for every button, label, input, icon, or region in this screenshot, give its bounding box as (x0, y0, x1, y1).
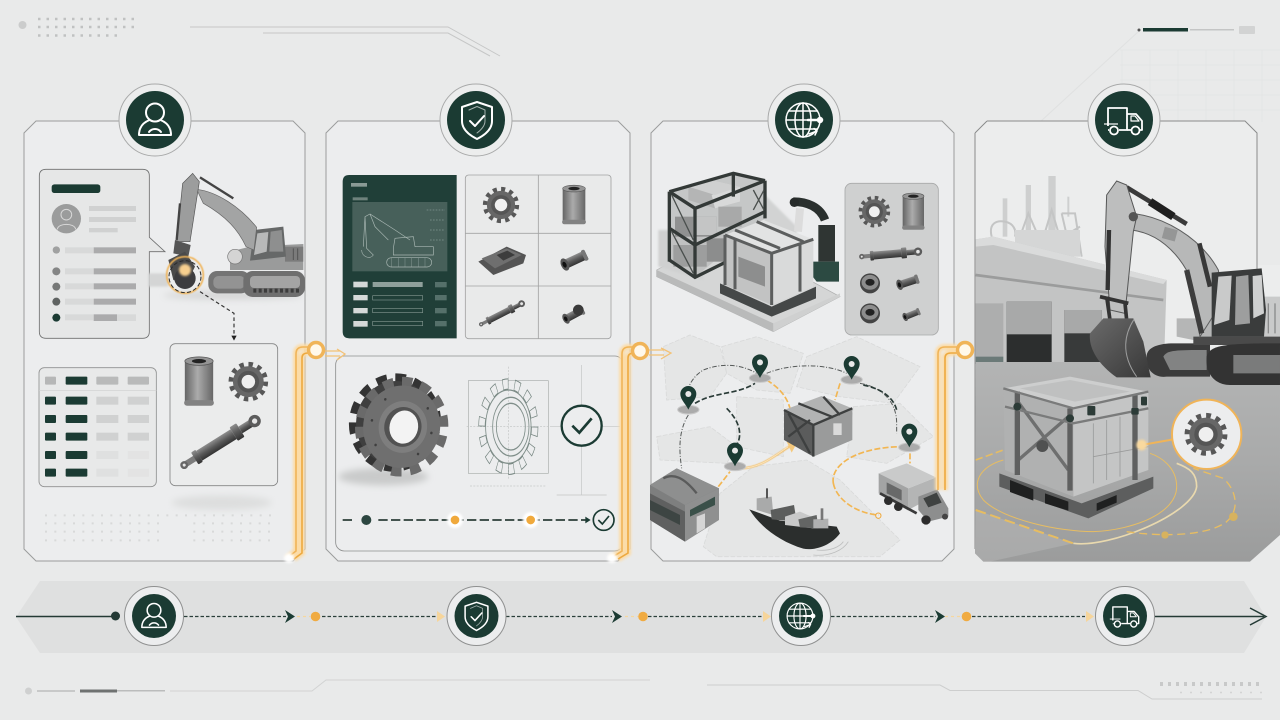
timeline orange markers (311, 612, 971, 621)
delivery truck (879, 463, 948, 525)
packing crate (720, 220, 816, 317)
icon badge: user (119, 84, 191, 156)
progress timeline (343, 510, 614, 530)
process timeline band (16, 581, 1266, 653)
parts grid (465, 175, 611, 339)
large gear (347, 373, 451, 477)
timeline node: shield (447, 586, 506, 646)
connector: step 3 to step 4 (938, 342, 972, 490)
icon badge: globe (768, 84, 840, 156)
connector: step 2 to step 3 (607, 344, 671, 563)
timeline node: truck (1096, 586, 1154, 646)
faint route map (657, 335, 933, 557)
callout: delivered gear (1136, 400, 1241, 469)
decorative dot field (45, 515, 275, 540)
robot arm (790, 198, 839, 282)
panel: step 1 request (24, 121, 305, 561)
connector: step 1 to step 2 (284, 342, 345, 563)
dashed delivery routes (680, 365, 910, 518)
icon badge: shield (440, 84, 512, 156)
icon badge: truck (1088, 84, 1160, 156)
yellow ground route (976, 450, 1238, 544)
timeline node: user (124, 586, 184, 646)
large excavator (1090, 181, 1280, 385)
dark blueprint sheet (343, 175, 457, 338)
warehouse platform with rack and crate (657, 173, 840, 332)
parts data table (39, 368, 156, 487)
gear blueprint (467, 367, 550, 486)
timeline pale arrows (437, 611, 1094, 622)
warehouse building (650, 468, 719, 542)
bottom right decoration (707, 684, 1262, 699)
icon: small excavator (148, 173, 305, 299)
arrow: dashed to parts box (200, 292, 237, 341)
yard ground (975, 362, 1280, 562)
shadow (172, 495, 272, 510)
bottom left decoration (25, 680, 650, 694)
location pins (678, 354, 920, 471)
factory building (976, 237, 1167, 364)
callout: highlighted part on excavator (167, 257, 203, 293)
icon: approved check (550, 365, 620, 495)
parts box (170, 344, 278, 486)
shipment crate (784, 396, 852, 457)
panel: step 2 verification (326, 121, 630, 561)
distant refinery (991, 176, 1082, 257)
crate on pallet (999, 377, 1153, 518)
parts panel (845, 183, 938, 335)
top left decoration (18, 19, 500, 56)
top right decoration (1040, 26, 1280, 122)
request form card (39, 169, 165, 338)
timeline track (16, 608, 1266, 625)
timeline arrows (285, 610, 945, 623)
shadow under gear (338, 468, 428, 485)
inspection panel (336, 356, 623, 551)
cargo ship (749, 488, 848, 555)
panel: step 3 logistics (650, 121, 954, 561)
panel: step 4 on-site delivery (975, 121, 1280, 562)
storage rack (669, 173, 765, 277)
timeline node: globe (772, 586, 830, 646)
